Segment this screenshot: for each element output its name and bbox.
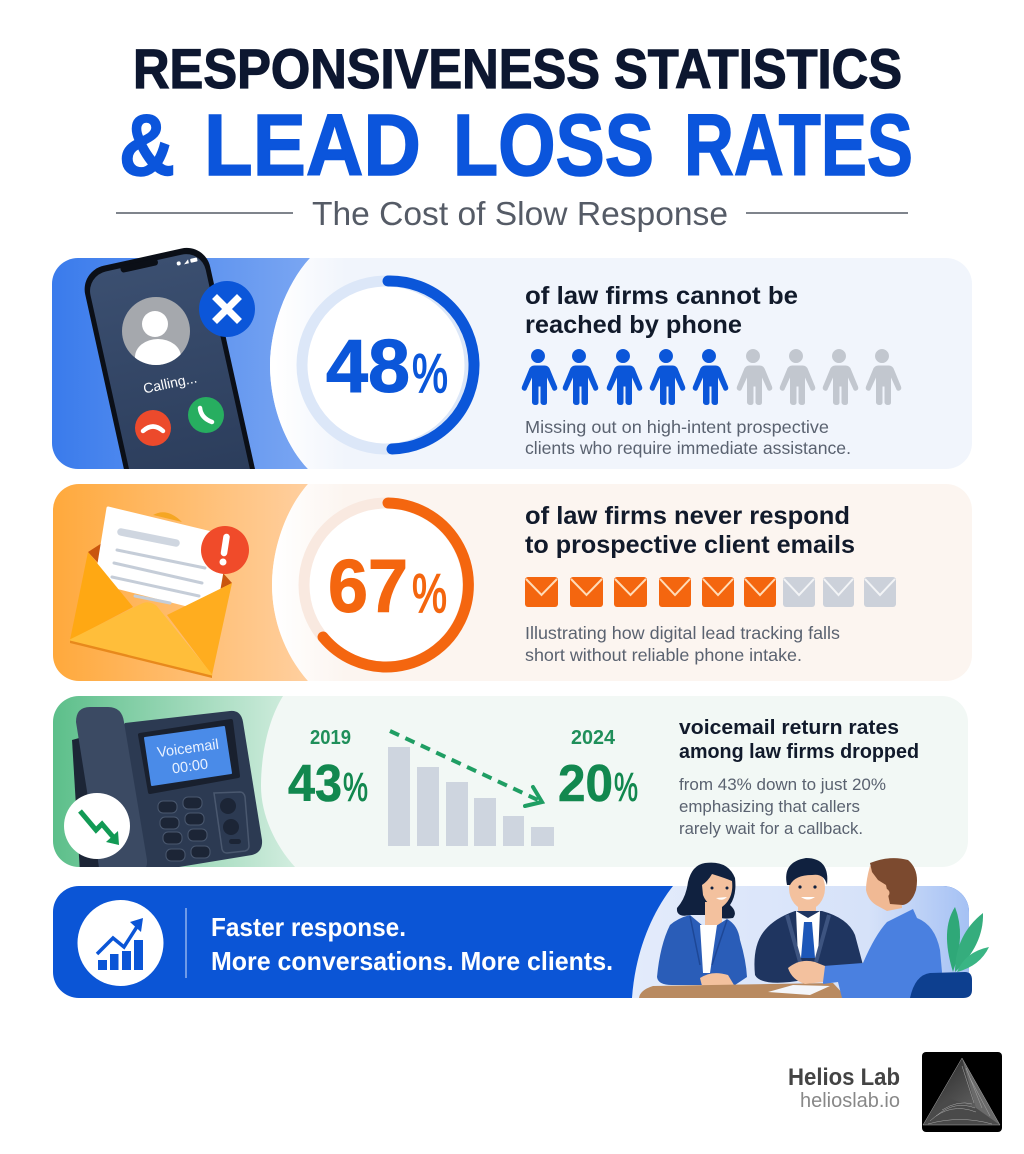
title: RATES: [684, 97, 913, 194]
stat: 2024: 2024: [571, 727, 616, 749]
title: &: [119, 97, 175, 194]
text: email description: Illustrating how digital lead tracking falls: [525, 623, 840, 643]
illustration: man from behind: [823, 858, 942, 998]
heading: email statistic: of law firms never respond: [525, 502, 850, 530]
heading: phone statistic: [525, 282, 798, 339]
icon row: people: [522, 349, 901, 405]
chart: 67% progress ring: %: [412, 562, 447, 624]
stat: 2024: [558, 727, 638, 813]
arrow: dashed decline: [390, 731, 542, 806]
stat: 2019: [288, 727, 368, 813]
heading: phone statistic: reached by phone: [525, 311, 742, 339]
text: call to action: [211, 912, 613, 976]
icon: desk phone: [72, 707, 262, 880]
icon row: envelopes: [525, 577, 896, 607]
heading: phone statistic: of law firms cannot be: [525, 282, 798, 310]
icon: phone calling: [84, 248, 255, 469]
text: voicemail description: rarely wait for a callback.: [679, 820, 863, 838]
stat: 2024: %: [614, 766, 638, 810]
heading: voicemail statistic: [679, 717, 919, 763]
icon: phone calling: Calling...: [142, 370, 198, 396]
text: phone description: Missing out on high-intent prospective: [525, 417, 829, 437]
illustration: woman: [657, 863, 747, 986]
stat: 2024: 20: [558, 755, 613, 813]
icon: failed call badge: [199, 281, 255, 337]
icon: growth chart: [78, 900, 164, 986]
footer brand text: helioslab.io: [800, 1090, 900, 1112]
text: phone description: [525, 417, 851, 458]
chart: declining bars: [388, 747, 554, 846]
subtitle: The Cost of Slow Response: [312, 195, 728, 232]
heading: voicemail statistic: voicemail return rates: [679, 717, 899, 739]
title: LOSS: [453, 97, 654, 194]
illustration: table with paper: [639, 983, 847, 998]
icon: desk phone: 00:00: [171, 757, 209, 777]
chart: 48% progress ring: 48: [326, 324, 410, 408]
chart: 48% progress ring: %: [412, 342, 448, 404]
title: LEAD: [204, 97, 421, 194]
text: voicemail description: [679, 776, 886, 838]
title: RESPONSIVENESS: [133, 37, 600, 100]
footer brand text: [788, 1064, 900, 1112]
icon: open envelope with alert: [70, 508, 249, 678]
text: voicemail description: emphasizing that callers: [679, 798, 860, 816]
panel: 48% cannot be reached by phone: [52, 248, 972, 469]
heading: email statistic: to prospective client emails: [525, 531, 855, 559]
panel: voicemail return rates: [53, 696, 968, 880]
heading: voicemail statistic: among law firms dropped: [679, 741, 919, 763]
chart: 67% progress ring: [304, 503, 468, 667]
chart: 67% progress ring: 67: [328, 544, 408, 628]
title: STATISTICS: [614, 37, 902, 100]
title: [119, 37, 913, 194]
text: email description: short without reliable phone intake.: [525, 645, 802, 665]
icon: Helios Lab logo: [922, 1052, 1002, 1132]
icon: falling trend badge: [64, 793, 130, 859]
footer brand text: Helios Lab: [788, 1064, 900, 1091]
icon: desk phone: Voicemail: [156, 737, 220, 761]
illustration: handshake: [788, 961, 825, 984]
stat: 2019: 2019: [310, 727, 351, 749]
panel: 67% never respond to emails: [53, 484, 972, 681]
illustration: chair: [910, 972, 972, 998]
illustration: man in suit: [754, 858, 863, 983]
text: voicemail description: from 43% down to just 20%: [679, 776, 886, 794]
text: call to action: More conversations. More clients.: [211, 946, 613, 976]
heading: email statistic: [525, 502, 855, 559]
text: phone description: clients who require immediate assistance.: [525, 438, 851, 458]
stat: 2019: 43: [288, 755, 342, 813]
chart: 48% progress ring: [302, 281, 474, 449]
text: call to action: Faster response.: [211, 912, 406, 942]
stat: 2019: %: [343, 766, 368, 810]
text: email description: [525, 623, 840, 665]
panel: call to action banner: [53, 858, 989, 998]
illustration: plant: [947, 907, 989, 972]
